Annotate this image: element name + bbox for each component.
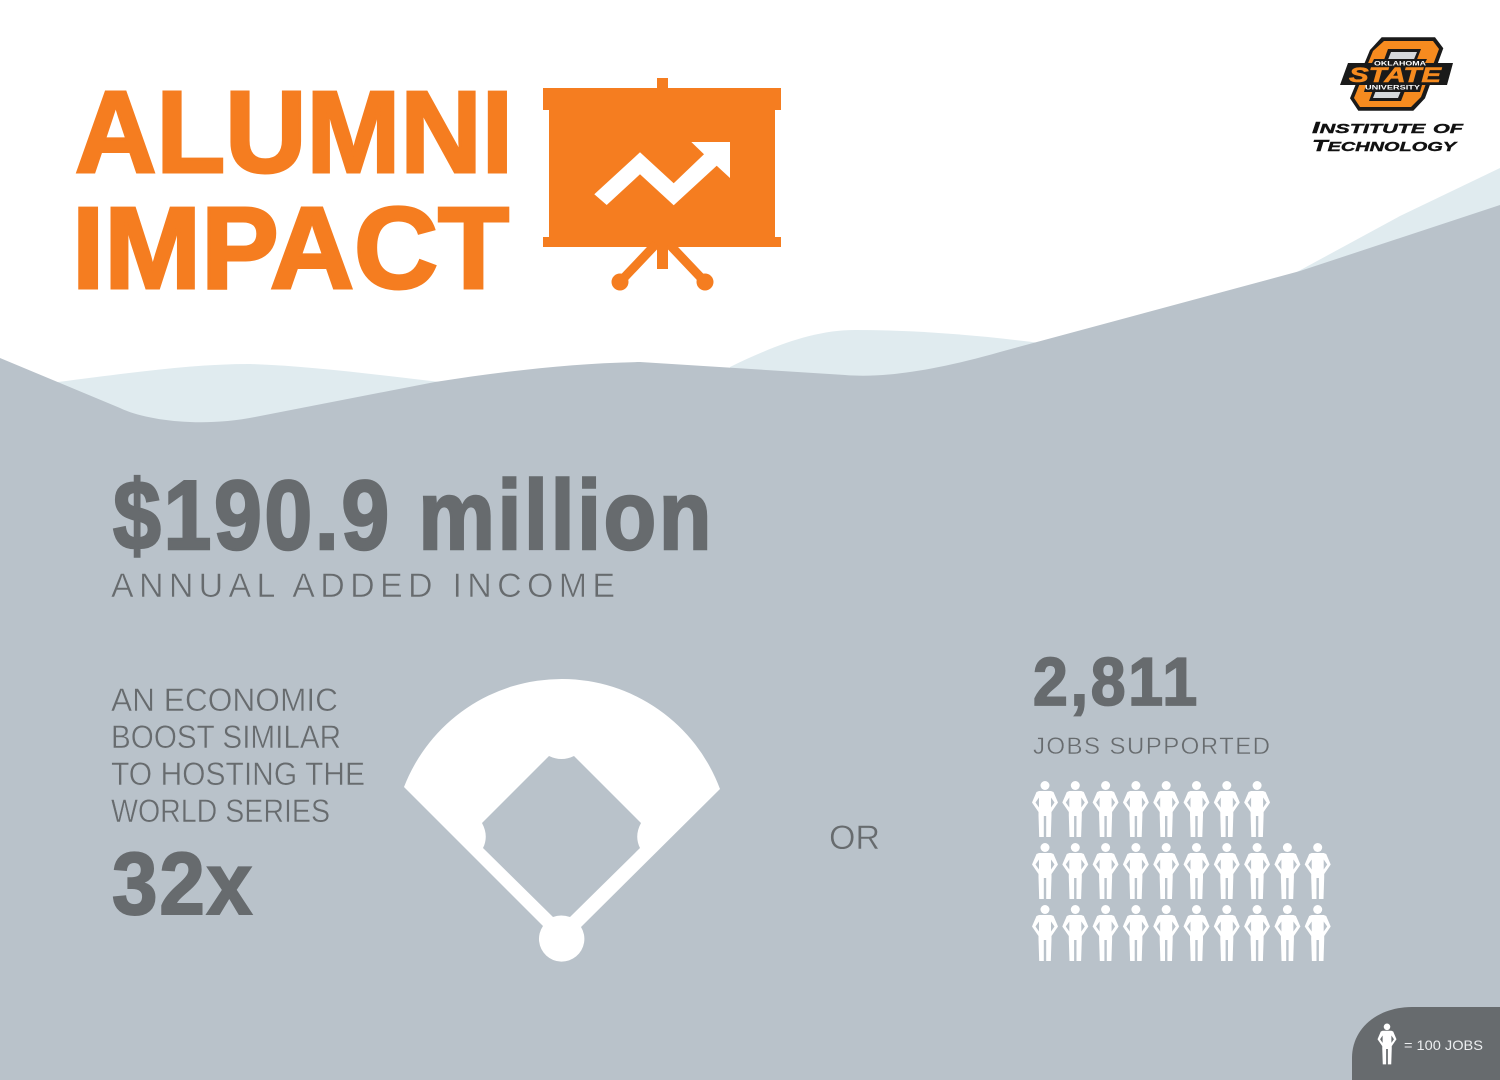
text block: world series comparison: TO HOSTING THE [111, 756, 365, 792]
title: IMPACT [72, 183, 509, 313]
icon: OSU O mark: OKLAHOMA [1374, 60, 1426, 68]
logo: Oklahoma State University Institute of Technology [1312, 37, 1464, 155]
text: OR: OR [829, 819, 880, 857]
title [72, 67, 513, 313]
headline stat: annual added income [111, 460, 714, 605]
legend: one person equals 100 jobs: = 100 JOBS [1404, 1037, 1483, 1053]
institute name: I NSTITUTE OF [1312, 120, 1464, 137]
icon: OSU O mark [1340, 37, 1453, 111]
institute name: T ECHNOLOGY [1312, 138, 1459, 155]
jobs stat [1033, 644, 1270, 760]
text block: world series comparison: AN ECONOMIC [111, 682, 338, 718]
headline stat: annual added income: $190.9 million [113, 460, 714, 570]
text block: world series comparison: BOOST SIMILAR [111, 719, 341, 755]
icon: presentation board with rising arrow [543, 78, 781, 290]
institute name [1312, 120, 1464, 155]
icon: OSU O mark: UNIVERSITY [1365, 84, 1421, 92]
text block: world series comparison [111, 682, 365, 933]
headline stat: annual added income: ANNUAL ADDED INCOME [111, 567, 615, 605]
icon: baseball diamond [404, 679, 720, 962]
title: ALUMNI [75, 67, 513, 197]
text block: world series comparison: 32x [112, 834, 254, 933]
jobs stat: 2,811 [1033, 644, 1200, 720]
jobs stat: JOBS SUPPORTED [1033, 733, 1270, 760]
legend: one person equals 100 jobs [1352, 1007, 1500, 1080]
text block: world series comparison: WORLD SERIES [111, 793, 330, 829]
icon: OSU O mark: STATE [1349, 64, 1442, 87]
pictogram: people representing jobs [1032, 781, 1331, 961]
